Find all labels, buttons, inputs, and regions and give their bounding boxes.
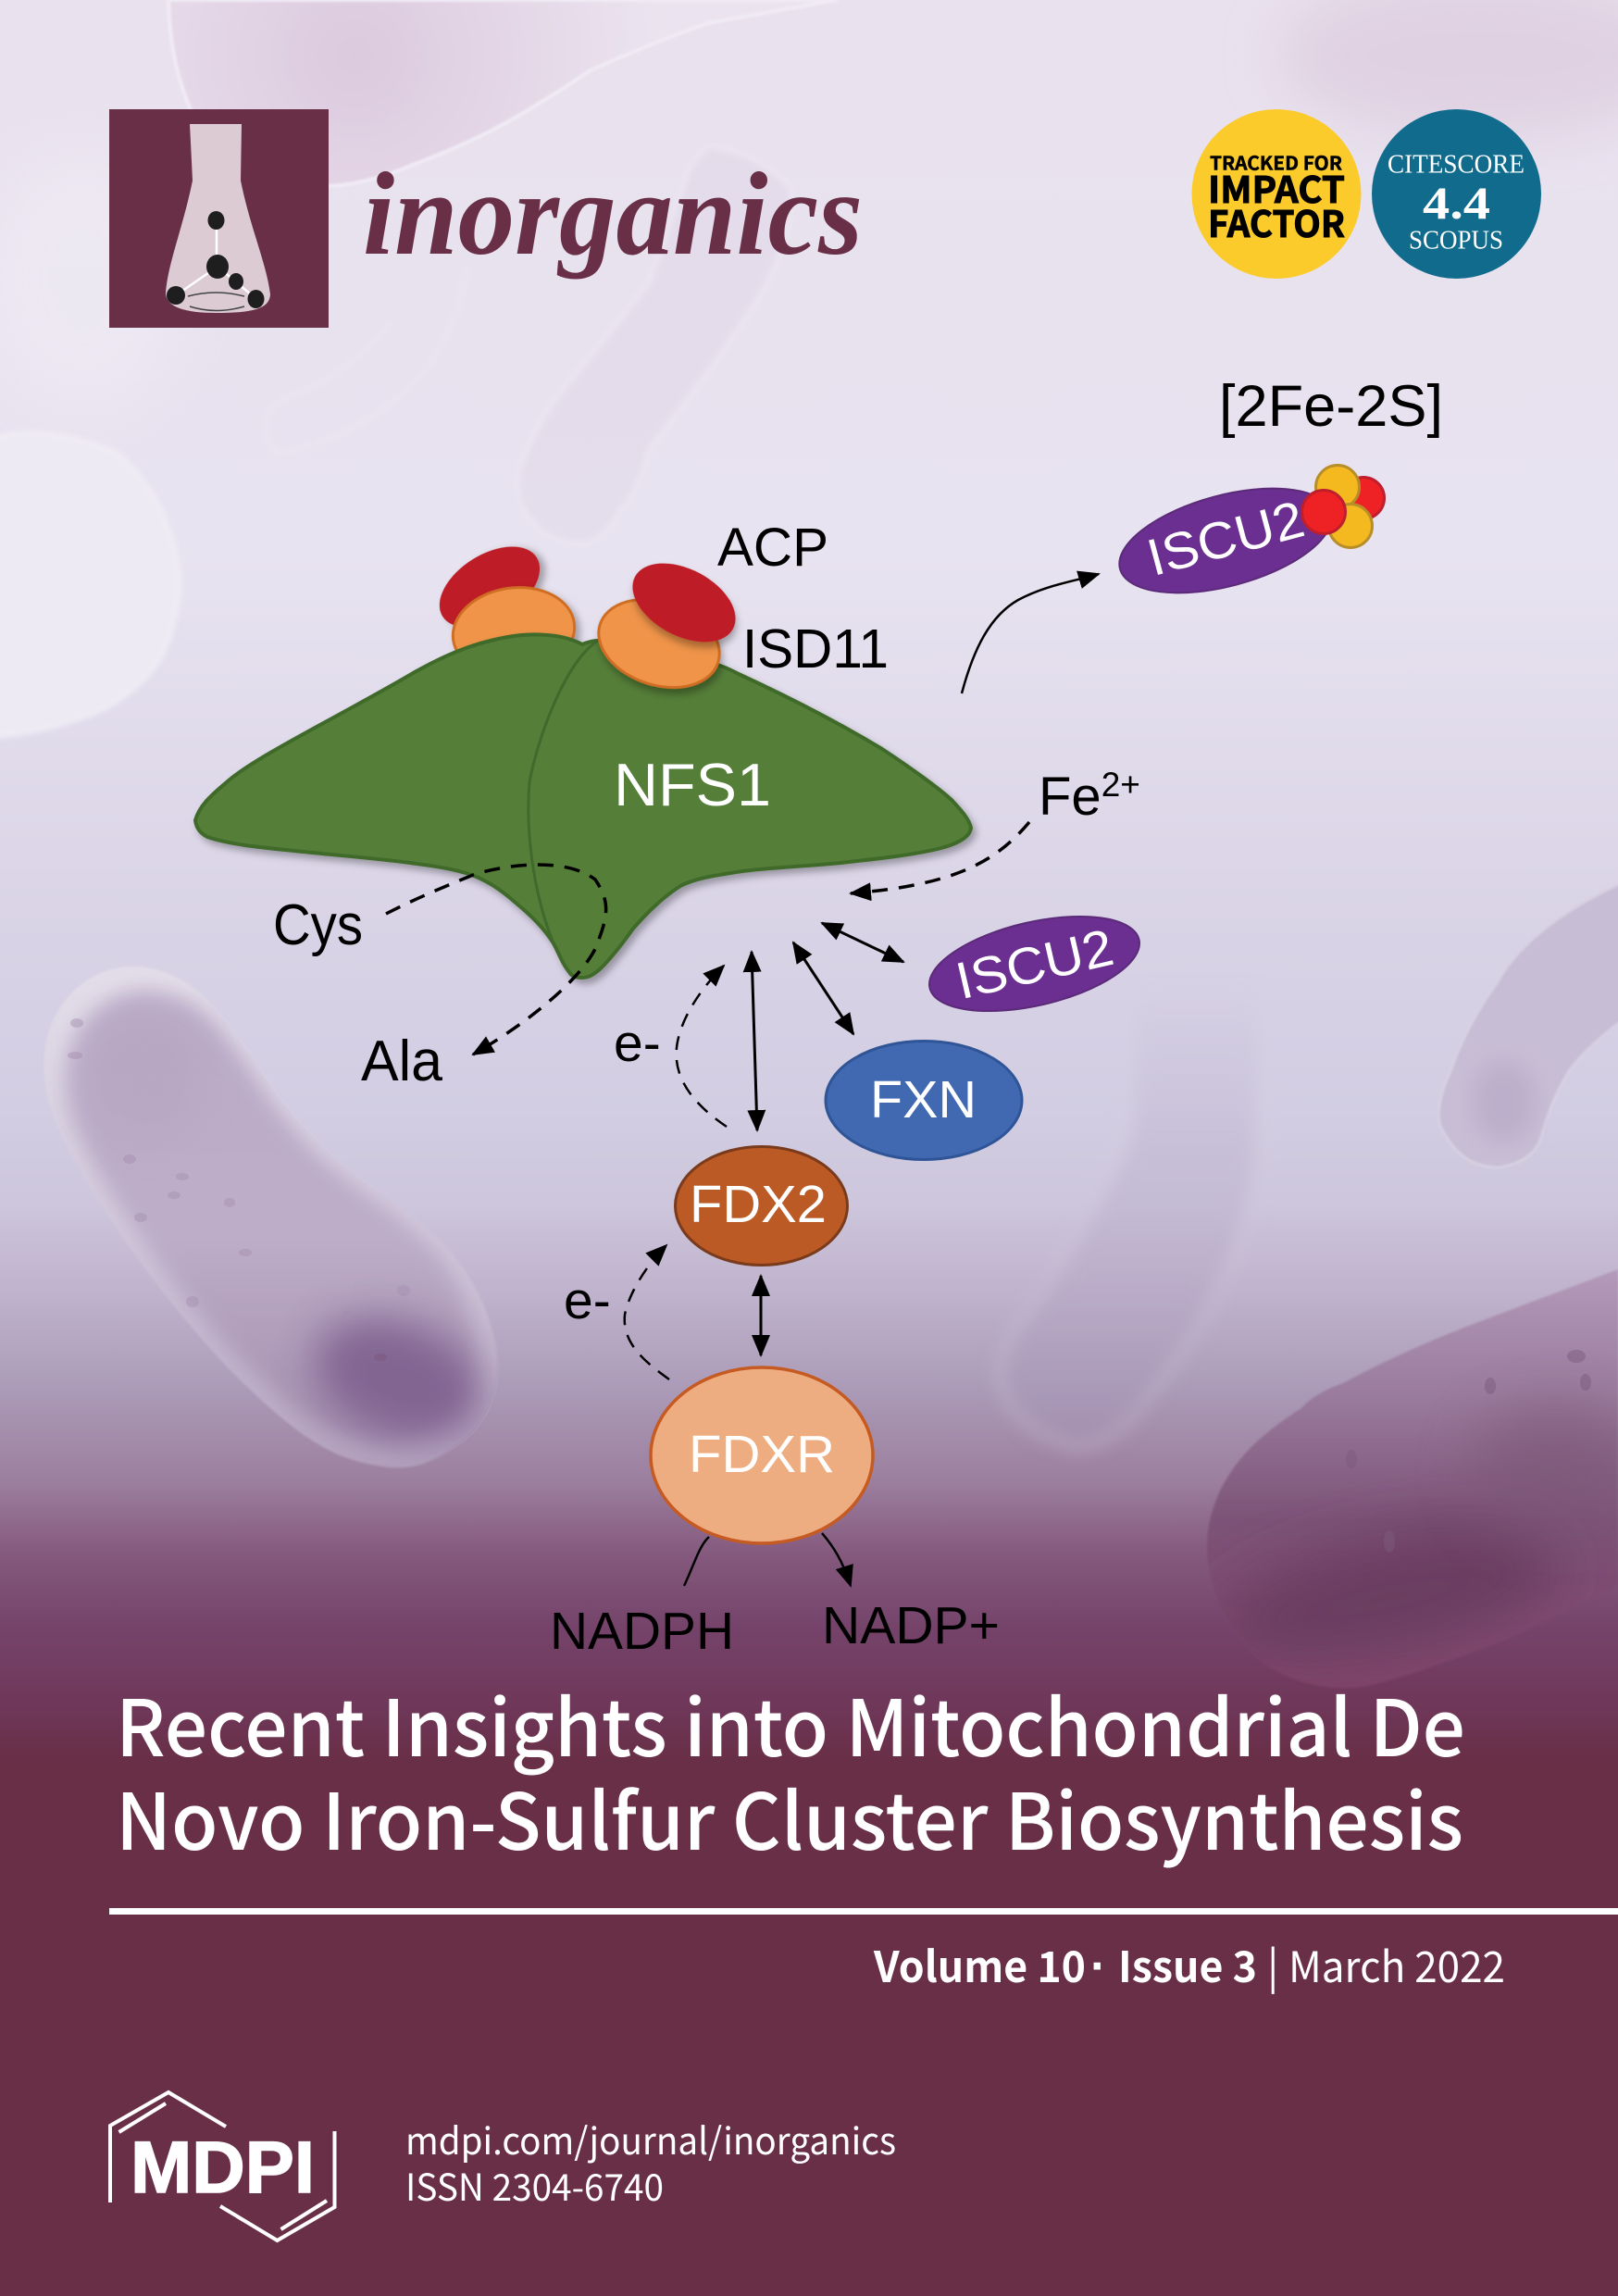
label: NADP+: NADP+ xyxy=(822,1596,1000,1655)
label: Cys: Cys xyxy=(273,893,363,957)
arrow: complex to ISCU2 xyxy=(822,923,903,962)
journal URL and ISSN: ISSN 2304-6740 xyxy=(405,2158,664,2212)
journal name: inorganics xyxy=(363,148,863,280)
arrow: complex to FXN xyxy=(793,942,853,1034)
label: 2Fe-2S cluster: [2Fe-2S] xyxy=(1219,374,1443,439)
label: Fe2+: 2+ xyxy=(1101,766,1140,804)
arrow: Cys to Ala through NFS1 xyxy=(386,865,606,1054)
badge: citescore: 4.4 xyxy=(1423,177,1490,229)
label: e- lower: e- xyxy=(564,1271,611,1330)
protein: FXN xyxy=(826,1041,1022,1159)
protein: ISCU2 free xyxy=(920,899,1149,1029)
journal URL and ISSN: mdpi.com/journal/inorganics xyxy=(405,2112,896,2165)
arrow: FDX2 to FDXR xyxy=(759,1276,763,1355)
protein: NFS1 complex: NFS1 xyxy=(614,751,771,818)
label: NADPH: NADPH xyxy=(550,1602,734,1661)
issue line: · xyxy=(1090,1940,1106,1993)
arrow: NADPH into FDXR xyxy=(684,1537,709,1586)
protein: NFS1 complex xyxy=(195,530,971,978)
issue line: Issue 3 xyxy=(1118,1934,1257,1995)
issue line xyxy=(873,1934,1505,1995)
arrow: to assembled cluster xyxy=(962,574,1099,693)
badge: citescore: SCOPUS xyxy=(1409,226,1503,256)
protein: FXN: FXN xyxy=(870,1070,977,1129)
arrow: electron transfer FDX2 to complex xyxy=(677,966,727,1127)
label: Ala: Ala xyxy=(361,1029,443,1093)
label: e- upper: e- xyxy=(614,1014,661,1073)
MDPI logo xyxy=(110,2092,335,2240)
journal URL and ISSN xyxy=(405,2112,896,2212)
article title xyxy=(116,1667,1465,1873)
badge: tracked for impact factor: FACTOR xyxy=(1208,196,1345,248)
arrow: Fe2+ to complex xyxy=(851,822,1029,893)
label: ISD11: ISD11 xyxy=(742,618,889,680)
arrow: electron transfer FDXR to FDX2 xyxy=(625,1245,669,1379)
protein: ISCU2 free: ISCU2 xyxy=(951,917,1118,1010)
badge: citescore xyxy=(1372,109,1541,279)
issue line: | xyxy=(1267,1934,1278,1995)
badge: tracked for impact factor xyxy=(1192,109,1361,279)
arrow: complex to FDX2 xyxy=(752,952,757,1130)
arrow: FDXR to NADP+ xyxy=(822,1533,851,1586)
protein: FDX2: FDX2 xyxy=(690,1175,827,1234)
protein: ISCU2 with iron-sulfur cluster xyxy=(1108,465,1385,613)
issue line: Volume 10 xyxy=(873,1934,1086,1995)
issue line: March 2022 xyxy=(1288,1934,1505,1995)
label: Fe2+: Fe xyxy=(1039,767,1101,827)
article title: Novo Iron-Sulfur Cluster Biosynthesis xyxy=(116,1761,1463,1873)
badge: citescore: CITESCORE xyxy=(1388,150,1525,180)
badge: tracked for impact factor: IMPACT xyxy=(1208,162,1345,214)
article title: Recent Insights into Mitochondrial De xyxy=(116,1667,1465,1779)
protein: ISCU2 with iron-sulfur cluster: ISCU2 xyxy=(1141,489,1310,587)
background with bacteria xyxy=(0,0,1618,1735)
protein: FDX2 xyxy=(676,1146,848,1265)
badge: tracked for impact factor: TRACKED FOR xyxy=(1210,148,1342,176)
journal logo: flask xyxy=(109,109,329,328)
divider rule xyxy=(109,1908,1618,1915)
protein: FDXR: FDXR xyxy=(689,1425,835,1484)
protein: FDXR xyxy=(651,1367,873,1543)
label: ACP: ACP xyxy=(717,518,828,578)
MDPI logo: MDPI xyxy=(131,2126,315,2208)
